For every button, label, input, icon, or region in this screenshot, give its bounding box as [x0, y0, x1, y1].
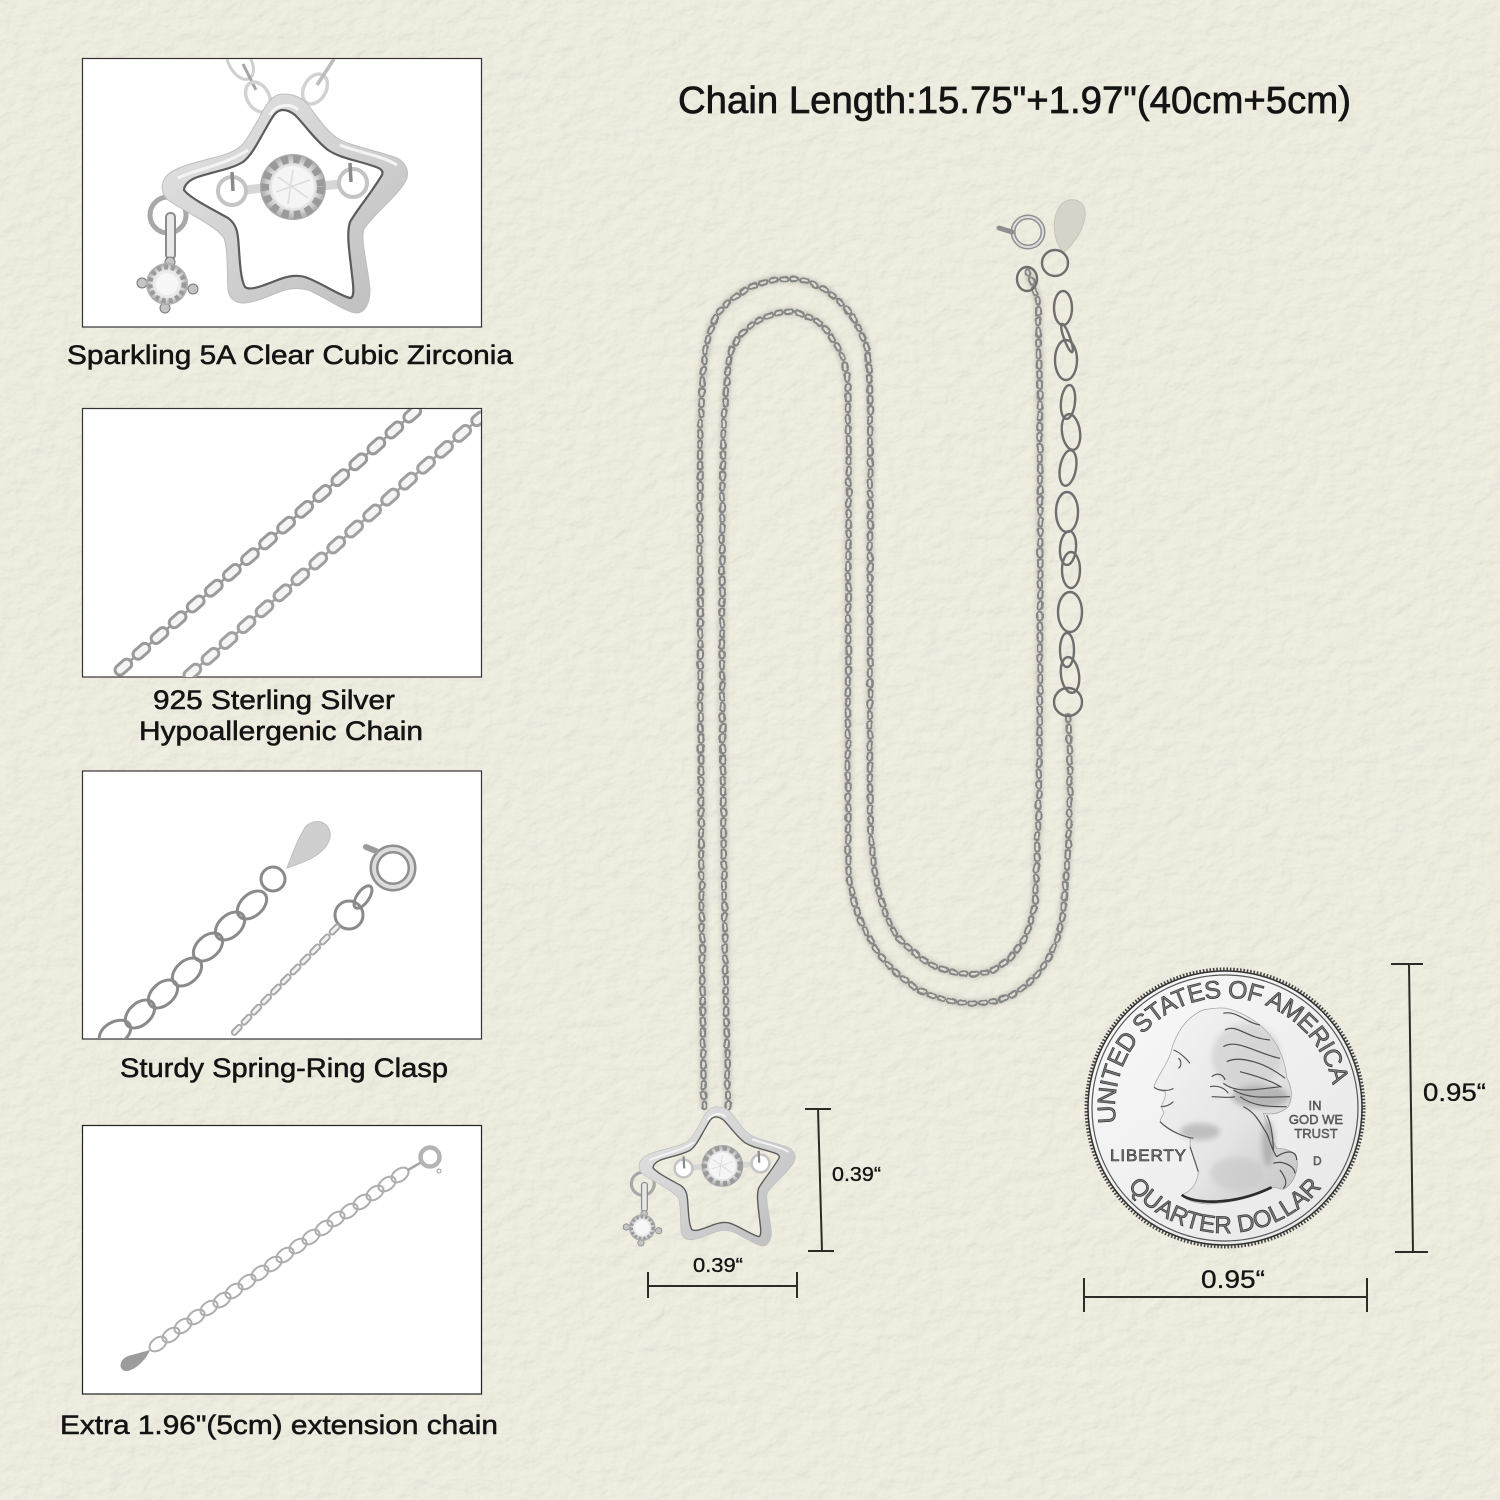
panel: sterling silver chain closeup [82, 408, 482, 677]
coin mint mark: D [1313, 1154, 1322, 1168]
coin legend: motto: TRUST [1294, 1126, 1338, 1141]
extension chain and clasp on necklace [999, 200, 1085, 716]
necklace chain [700, 272, 1070, 1108]
coin legend: bottom: QUARTER DOLLAR [1130, 1178, 1322, 1234]
dimension: coin width: 0.95“ [1201, 1266, 1265, 1294]
caption: cubic zirconia: Sparkling 5A Clear Cubic Zirconia [67, 340, 514, 370]
dimension: pendant width: 0.39“ [693, 1254, 743, 1277]
dimension: coin height: 0.95“ [1423, 1079, 1486, 1107]
caption: sterling silver: Hypoallergenic Chain [139, 716, 423, 746]
panel: cubic zirconia closeup [82, 40, 482, 327]
coin legend: motto: GOD WE [1289, 1112, 1343, 1127]
caption: extension chain: Extra 1.96"(5cm) extension chain [60, 1410, 498, 1440]
dimension: coin width [1084, 1266, 1367, 1312]
dimension: pendant height: 0.39“ [832, 1163, 881, 1186]
panel: spring-ring clasp closeup [82, 771, 482, 1051]
caption: sterling silver: 925 Sterling Silver [153, 685, 395, 715]
caption: clasp: Sturdy Spring-Ring Clasp [120, 1053, 448, 1083]
quarter coin [1084, 968, 1366, 1248]
star pendant [623, 1107, 795, 1246]
dimension: pendant height [805, 1109, 881, 1251]
coin legend: motto: IN [1308, 1098, 1322, 1113]
dimension: coin height [1391, 964, 1486, 1252]
coin legend: liberty: LIBERTY [1110, 1146, 1186, 1165]
coin portrait [1154, 1008, 1297, 1204]
dimension: pendant width [648, 1254, 797, 1298]
title: chain length: Chain Length:15.75"+1.97"(40cm+5cm) [678, 80, 1351, 122]
coin legend: top: UNITED STATES OF AMERICA [1097, 980, 1348, 1122]
panel: extension chain closeup [82, 1126, 482, 1394]
